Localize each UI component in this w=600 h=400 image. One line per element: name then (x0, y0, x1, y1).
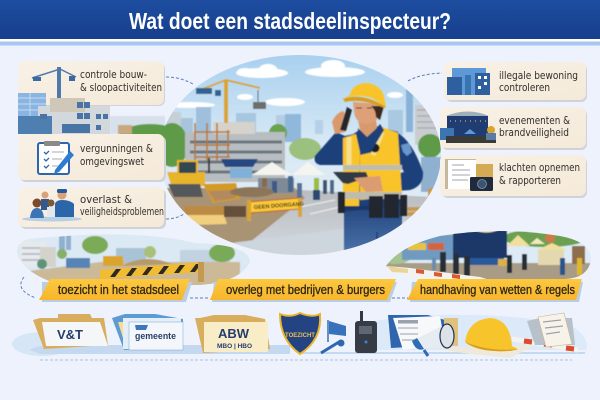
right card: evenementen: brandveiligheid (499, 127, 569, 139)
icon: hard hat (465, 318, 518, 351)
right card: evenementen: evenementen & (499, 115, 570, 127)
icon: apartment block (447, 68, 490, 95)
road barrier stripe (100, 262, 204, 282)
ground (252, 190, 428, 240)
tablet (333, 172, 368, 184)
torso (344, 124, 402, 212)
body camera (370, 144, 380, 152)
ribbon: toezicht: toezicht in het stadsdeel (58, 283, 179, 297)
ribbon: overleg (210, 279, 397, 302)
dirt mound (230, 187, 274, 197)
badge: TOEZICHT (280, 313, 320, 354)
barrier GEEN DOORGANG (247, 198, 304, 221)
head (353, 102, 382, 124)
folder: V&T: V&T (57, 327, 83, 342)
folder: gemeente (112, 314, 183, 350)
ribbon: toezicht (39, 279, 192, 302)
glass panel (421, 157, 441, 192)
sand block (184, 206, 224, 215)
left sleeve (315, 132, 354, 165)
tower crane (196, 80, 266, 123)
right card: illegale bewoning: controleren (499, 82, 550, 94)
hand on tablet (354, 176, 383, 192)
right sleeve (398, 133, 424, 192)
icon: document and camera (445, 159, 493, 191)
inspector (315, 83, 423, 258)
bulldozer (167, 158, 240, 203)
bottom shelf (12, 315, 587, 360)
ribbon: handhaving: handhaving van wetten & regels (420, 283, 575, 297)
icon: megaphone (412, 324, 454, 356)
hand and forearm (332, 111, 350, 134)
folder: ABW: MBO | HBO (217, 343, 252, 350)
left card: controle bouw: & sloopactiviteiten (80, 82, 162, 94)
left card: vergunningen (18, 134, 166, 182)
lower left scene (17, 234, 250, 285)
right card: klachten: & rapporteren (499, 175, 561, 187)
central scene (164, 55, 441, 255)
left card: controle bouw: controle bouw- (80, 69, 147, 81)
left card: vergunningen: vergunningen & (80, 143, 153, 155)
wooden barricade right (406, 188, 434, 216)
icon: walkie-talkie (355, 311, 377, 353)
belt (338, 192, 407, 218)
right card: illegale bewoning (444, 62, 587, 102)
crowd (258, 176, 334, 200)
left card: overlast: overlast & (80, 194, 132, 206)
striped barrier right (387, 266, 490, 280)
title: Wat doet een stadsdeelinspecteur? (129, 8, 451, 34)
skyline (165, 87, 440, 145)
clouds (165, 60, 403, 108)
phone (340, 107, 352, 131)
right card: evenementen (440, 107, 587, 150)
right card: klachten (440, 155, 587, 198)
navy awning (221, 159, 258, 167)
icon: stacked documents (527, 313, 575, 347)
legs (343, 204, 403, 250)
left card: overlast (18, 187, 166, 229)
lower right scene (386, 231, 591, 279)
shoulder patch (401, 143, 412, 156)
badge: TOEZICHT: TOEZICHT (285, 333, 315, 339)
building under construction (185, 122, 285, 182)
right card: illegale bewoning: illegale bewoning (499, 70, 578, 82)
ribbon: handhaving (407, 279, 583, 302)
folder: gemeente: gemeente (135, 331, 176, 341)
left card: controle bouw (18, 61, 165, 134)
yellow vest (343, 127, 402, 207)
icon: papers and tape (432, 339, 578, 358)
header banner (0, 0, 600, 46)
icon: documents folder (388, 315, 458, 350)
neck and collar (358, 120, 377, 137)
icon: flag and microphone (321, 320, 346, 353)
tents (252, 162, 325, 175)
icon: building with crane (18, 67, 110, 134)
icon: clipboard (38, 141, 74, 174)
folder: ABW: ABW (218, 326, 250, 341)
left card: overlast: veiligheidsproblemen (80, 206, 164, 218)
trees (156, 123, 442, 167)
folder: V&T (33, 314, 108, 349)
icon: stage with crowd (440, 112, 496, 143)
icon: people (22, 189, 82, 222)
hard hat (343, 83, 386, 107)
dashed connectors (21, 73, 442, 298)
tree between left cards (110, 116, 180, 148)
right card: klachten: klachten opnemen (499, 162, 580, 174)
ribbon: overleg: overleg met bedrijven & burgers (226, 283, 385, 297)
folder: ABW (195, 315, 270, 353)
barrier GEEN DOORGANG: GEEN DOORGANG (254, 202, 304, 211)
left card: vergunningen: omgevingswet (80, 156, 144, 168)
